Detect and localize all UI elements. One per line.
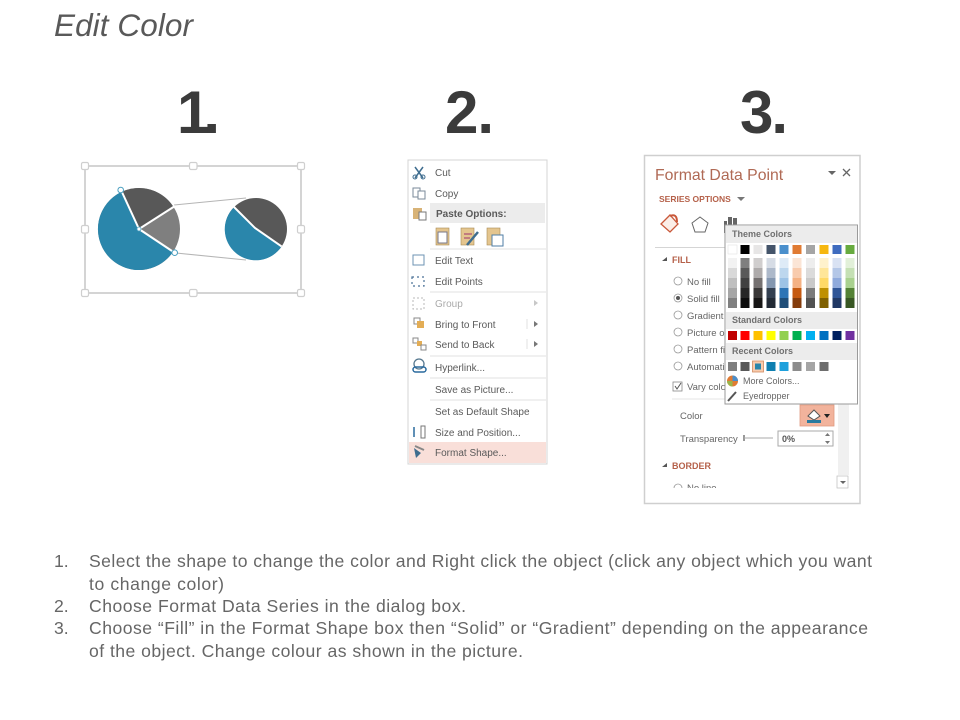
- panel: context menu: [408, 160, 547, 464]
- step 1 text: to change color): [89, 574, 224, 594]
- step 3 text: of the object. Change colour as shown in the picture.: [89, 641, 523, 661]
- title: Edit Color: [54, 7, 194, 43]
- fill section: [662, 255, 735, 393]
- recent colors: [726, 343, 857, 372]
- transparency row: [680, 431, 833, 446]
- format shape highlight: [409, 442, 546, 463]
- menu labels: Save as Picture...: [435, 385, 513, 396]
- step 2 text: Choose Format Data Series in the dialog box.: [89, 596, 466, 616]
- step number 2: 2.: [445, 79, 494, 146]
- secondary pie: [225, 198, 287, 260]
- connector lines: [174, 198, 246, 260]
- step 3 text: [54, 618, 868, 661]
- menu icons: [412, 167, 503, 458]
- step 3 text: Choose “Fill” in the Format Shape box then “Solid” or “Gradient” depending on the appearance: [89, 618, 868, 638]
- menu labels: Send to Back: [435, 340, 495, 351]
- step 3 text: 3.: [54, 618, 69, 638]
- fill section: FILL: [672, 255, 691, 265]
- theme colors: Theme Colors: [732, 229, 792, 239]
- standard colors: [726, 312, 857, 340]
- step number 3: 3.: [740, 79, 788, 146]
- fill section: Vary colors: [687, 382, 734, 393]
- theme colors: [726, 226, 857, 254]
- menu labels: Bring to Front: [435, 320, 496, 331]
- selection frame: [82, 162, 304, 296]
- main pie: [98, 187, 180, 270]
- tab icons: [661, 215, 737, 233]
- color row: [680, 405, 834, 426]
- step number 1: 1.: [177, 79, 220, 146]
- step 1 text: [54, 551, 872, 594]
- fill section: Solid fill: [687, 294, 720, 305]
- color row: Color: [680, 411, 703, 422]
- instructions: [54, 551, 872, 661]
- menu labels: Edit Points: [435, 277, 483, 288]
- menu labels: Edit Text: [435, 256, 473, 267]
- menu labels: Paste Options:: [436, 209, 507, 220]
- panel: selected pie chart: [82, 162, 304, 296]
- submenu arrows: [534, 300, 538, 347]
- step 1 text: 1.: [54, 551, 69, 571]
- border section: [650, 461, 840, 502]
- fill section: Automatic: [687, 362, 729, 373]
- recent colors: Recent Colors: [732, 346, 793, 356]
- eyedropper: Eyedropper: [743, 391, 790, 401]
- colour picker popup: [725, 225, 858, 404]
- step 2 text: 2.: [54, 596, 69, 616]
- pane title: Format Data Point: [655, 167, 784, 184]
- theme shades: [728, 258, 854, 308]
- panel: format data point: [644, 156, 860, 504]
- standard colors: Standard Colors: [732, 315, 802, 325]
- pane close controls: [828, 169, 850, 176]
- menu labels: Group: [435, 299, 463, 310]
- fill section: No fill: [687, 277, 711, 288]
- fill section: Pattern fill: [687, 345, 729, 356]
- more colors: More Colors...: [743, 376, 800, 386]
- fill section: Picture or: [687, 328, 728, 339]
- transparency row: Transparency: [680, 434, 738, 445]
- step 1 text: Select the shape to change the color and Right click the object (click any object which you want: [89, 551, 872, 571]
- menu labels: Hyperlink...: [435, 363, 485, 374]
- border section: BORDER: [672, 461, 712, 471]
- menu labels: Copy: [435, 189, 458, 200]
- fill section: Gradient fill: [687, 311, 735, 322]
- menu labels: Cut: [435, 168, 451, 179]
- scrollbar: [837, 225, 849, 488]
- menu labels: Format Shape...: [435, 448, 507, 459]
- series options: SERIES OPTIONS: [659, 194, 731, 204]
- menu separators: [430, 249, 546, 400]
- menu labels: Set as Default Shape: [435, 407, 530, 418]
- menu labels: [435, 168, 530, 459]
- transparency row: 0%: [782, 434, 795, 444]
- paste options highlight: [430, 203, 545, 223]
- border section: No line: [687, 483, 717, 494]
- menu labels: Size and Position...: [435, 428, 521, 439]
